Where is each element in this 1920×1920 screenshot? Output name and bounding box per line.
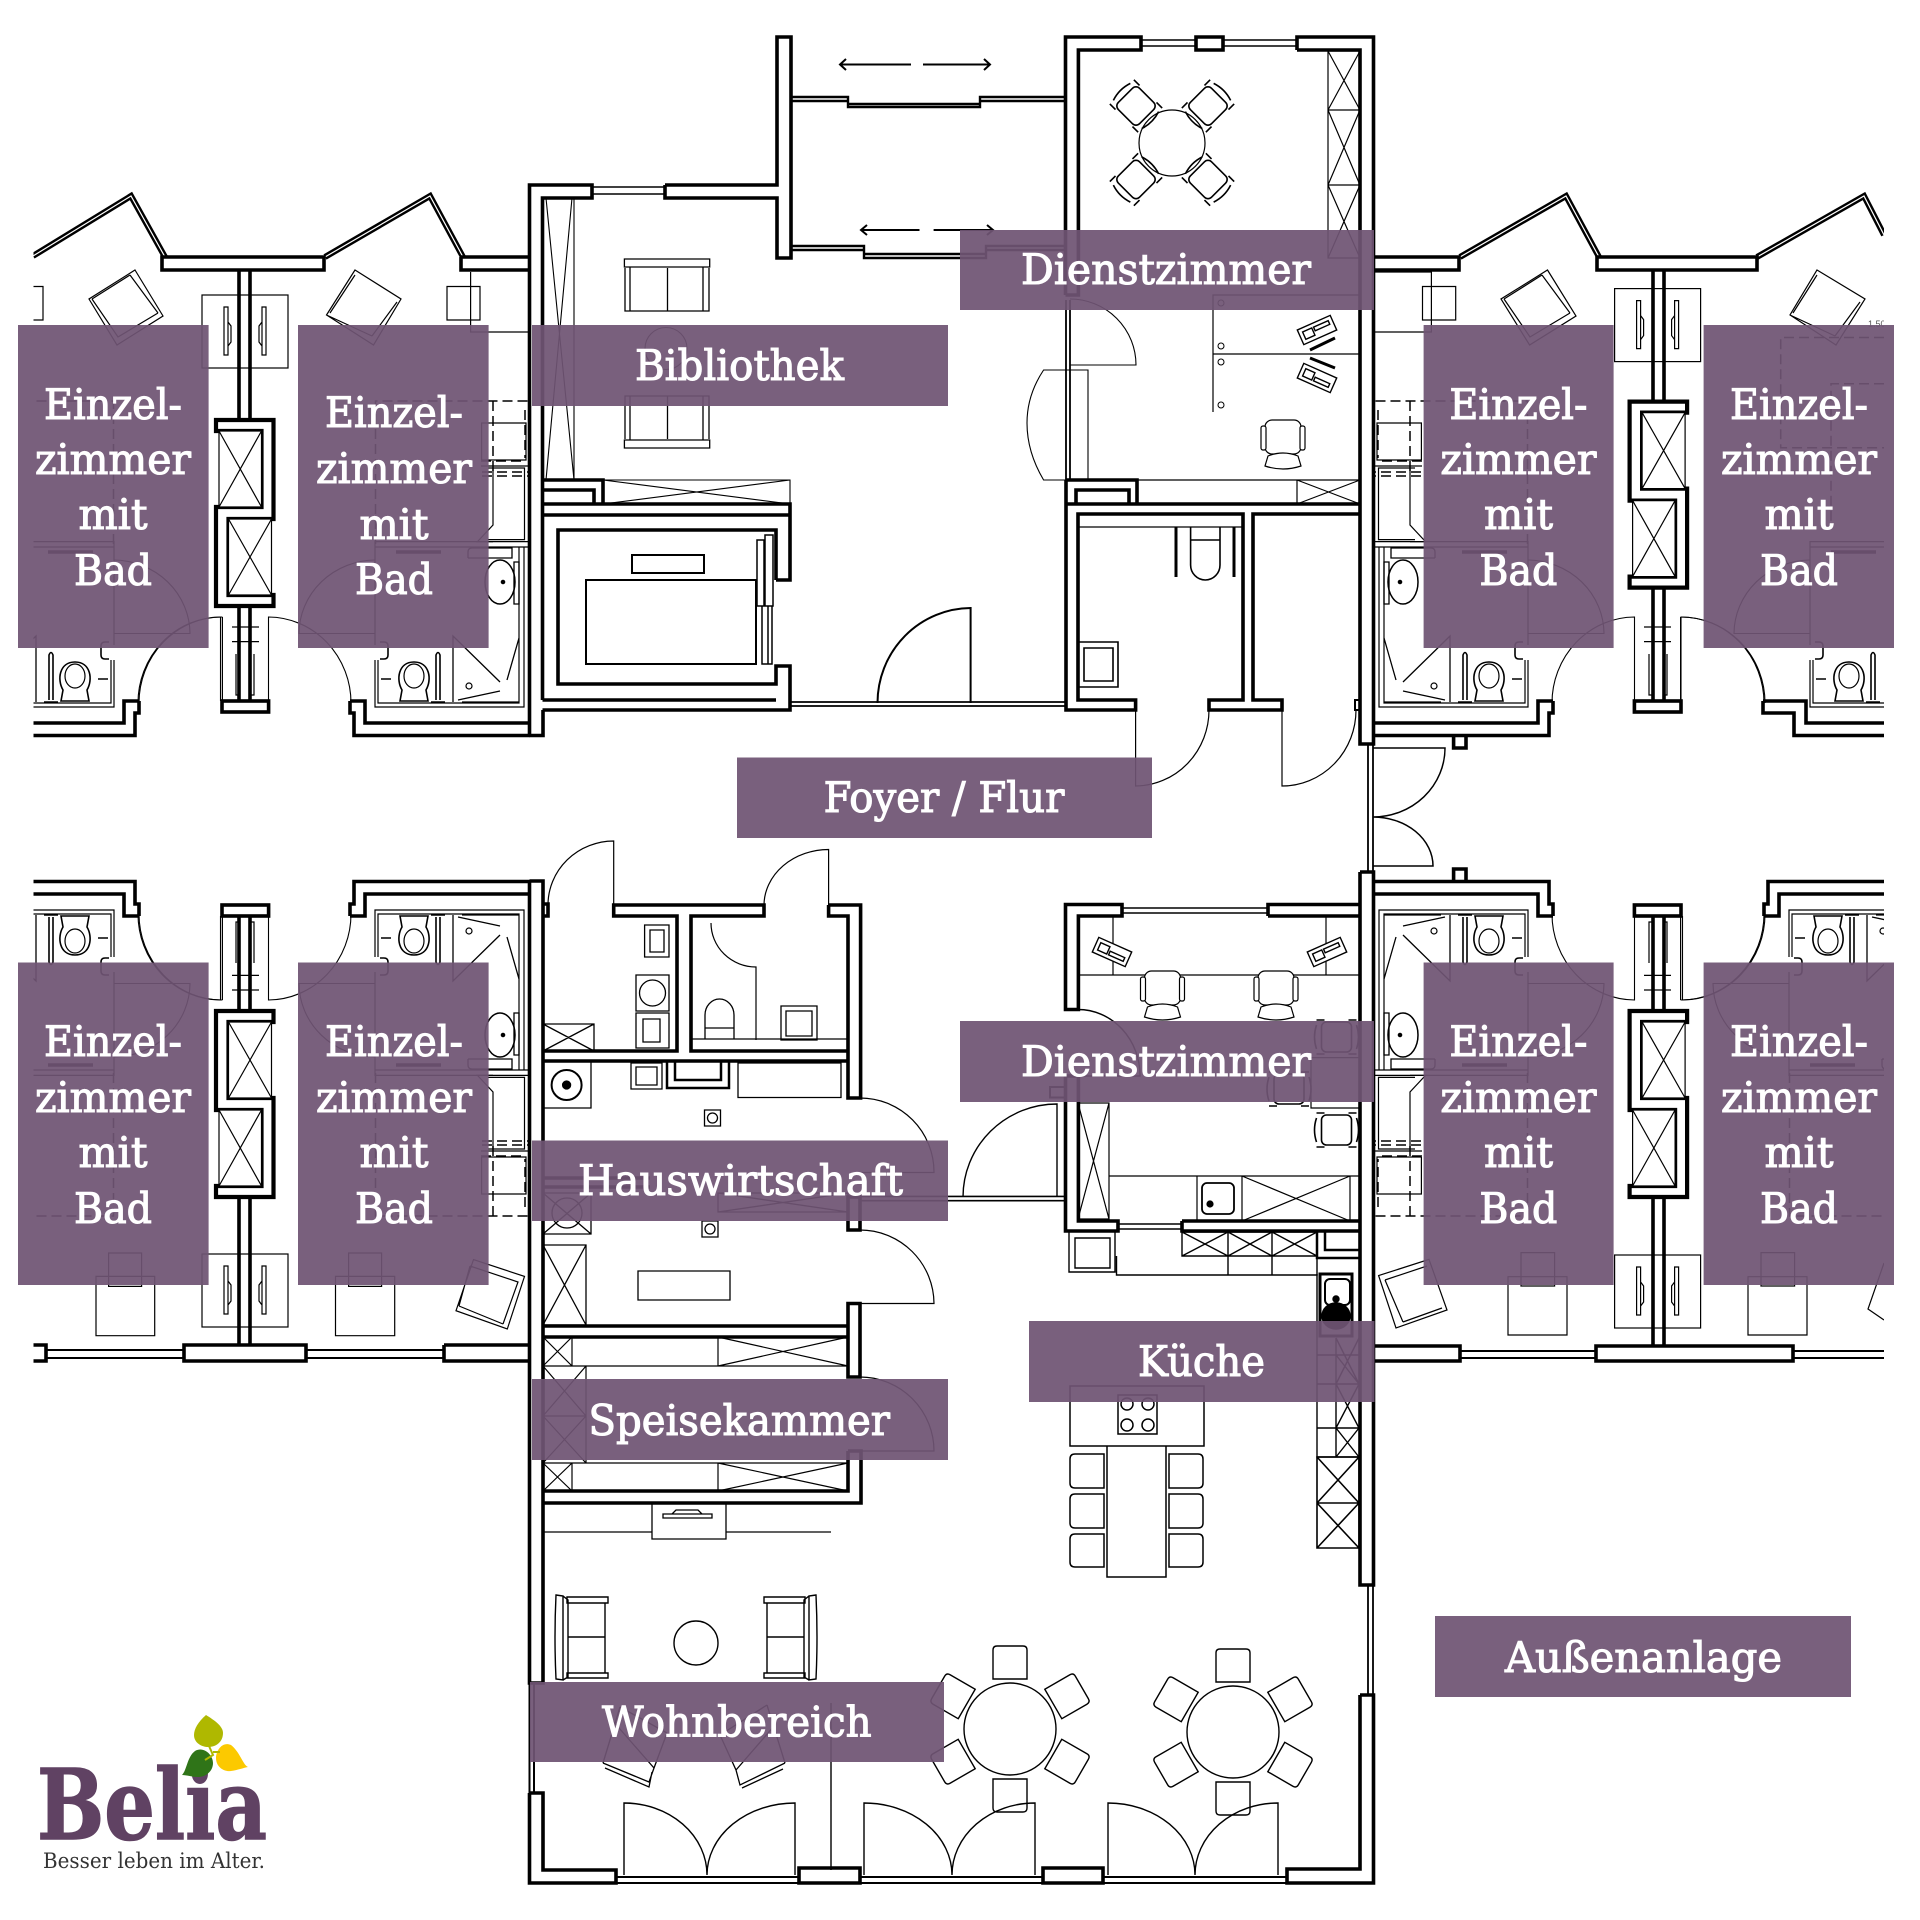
- panel: Einzelzimmer bottom left 2: Einzel-: [325, 1017, 463, 1066]
- panel: Einzelzimmer bottom left 1: zimmer: [35, 1073, 192, 1122]
- fixtures: Hauswirtschaft: [543, 925, 848, 1325]
- dining tables: Wohnbereich: [930, 1646, 1313, 1815]
- wing: bottom right rooms: [1373, 882, 1920, 1361]
- side table: Bibliothek: [645, 328, 687, 370]
- panel: Einzelzimmer top left 2: [298, 325, 489, 648]
- panel: Einzelzimmer top right 1: Bad: [1479, 546, 1557, 595]
- walls: Hauswirtschaft: [530, 881, 861, 1683]
- panel: Küche: [1029, 1321, 1374, 1402]
- panel: Einzelzimmer top right 2: zimmer: [1721, 435, 1878, 484]
- logo tagline: Besser leben im Alter.: [43, 1849, 265, 1873]
- panel: Einzelzimmer bottom right 1: [1424, 962, 1614, 1285]
- panel: Hauswirtschaft: Hauswirtschaft: [578, 1156, 903, 1205]
- panel: Einzelzimmer top left 2: zimmer: [316, 444, 473, 493]
- kitchen island and table: [1070, 1386, 1204, 1577]
- panel: Einzelzimmer top right 2: Einzel-: [1730, 380, 1868, 429]
- coffee table: Wohnbereich: [674, 1621, 718, 1665]
- panel: Einzelzimmer top left 1: zimmer: [35, 435, 192, 484]
- panel: Einzelzimmer bottom right 2: zimmer: [1721, 1073, 1878, 1122]
- panel: Einzelzimmer top left 1: mit: [78, 490, 148, 539]
- walls: Dienstzimmer lower: [860, 904, 1360, 1231]
- doors: Dienstzimmer lower: [963, 1010, 1140, 1197]
- panel: Einzelzimmer bottom right 2: Einzel-: [1730, 1017, 1868, 1066]
- panel: Einzelzimmer bottom right 1: zimmer: [1440, 1073, 1597, 1122]
- kitchen units: [1069, 1231, 1360, 1548]
- front glazing and main door: [790, 702, 1066, 706]
- panel: Einzelzimmer top right 1: [1424, 325, 1614, 648]
- sliding windows terrace: [791, 97, 1065, 258]
- armchairs: Wohnbereich: [603, 1705, 785, 1788]
- panel: Dienstzimmer top: Dienstzimmer: [1021, 245, 1312, 294]
- kitchenette: Dienstzimmer lower: [1078, 1020, 1360, 1221]
- panel: Einzelzimmer bottom right 2: Bad: [1760, 1184, 1838, 1233]
- desk: Dienstzimmer lower: [1078, 916, 1360, 1020]
- panel: Einzelzimmer bottom right 1: mit: [1484, 1128, 1553, 1177]
- panel: Dienstzimmer lower: [960, 1021, 1374, 1102]
- logo wordmark: Belia: [37, 1748, 267, 1862]
- arrow: sliding direction: [840, 59, 993, 235]
- WC fixtures: [1078, 527, 1220, 687]
- wing: bottom left rooms: [0, 882, 530, 1361]
- panel: Einzelzimmer bottom left 2: [298, 962, 489, 1285]
- panel: Speisekammer: Speisekammer: [588, 1396, 891, 1445]
- shelves: Speisekammer: [543, 1337, 848, 1491]
- shelf: Dienstzimmer: [1328, 51, 1360, 258]
- panel: Dienstzimmer top: [960, 230, 1374, 310]
- panel: Einzelzimmer bottom right 2: mit: [1764, 1128, 1834, 1177]
- panel: Einzelzimmer top left 1: [18, 325, 209, 648]
- panel: Foyer / Flur: [737, 758, 1152, 838]
- entrance doors and right wall: [1287, 736, 1466, 1883]
- panel: Einzelzimmer top left 2: Einzel-: [325, 388, 463, 437]
- panel: Einzelzimmer top left 1: Einzel-: [44, 380, 182, 429]
- logo: Belia: [37, 1715, 267, 1873]
- main building walls: [530, 37, 1466, 1883]
- panel: Einzelzimmer bottom left 1: mit: [78, 1128, 148, 1177]
- panel: Einzelzimmer top right 2: [1704, 325, 1894, 648]
- doors: Hauswirtschaft: [548, 841, 934, 1451]
- panel: Einzelzimmer bottom left 2: zimmer: [316, 1073, 473, 1122]
- desk: Dienstzimmer: [1213, 295, 1360, 469]
- panel: Einzelzimmer bottom right 1: Einzel-: [1449, 1017, 1587, 1066]
- table and chairs: Dienstzimmer meeting: [1108, 78, 1236, 207]
- panel: Einzelzimmer top left 1: Bad: [74, 546, 152, 595]
- panel: Einzelzimmer top right 1: mit: [1484, 490, 1553, 539]
- panel: Wohnbereich: [530, 1682, 944, 1762]
- panel: Foyer / Flur: Foyer / Flur: [824, 773, 1065, 822]
- panel: Bibliothek: Bibliothek: [635, 341, 845, 390]
- room wings: [0, 196, 1920, 1361]
- wing: top right rooms: [1373, 196, 1920, 736]
- panel: Einzelzimmer top right 2: mit: [1764, 490, 1834, 539]
- panel: Küche: Küche: [1138, 1337, 1265, 1386]
- panel: Einzelzimmer bottom left 2: Bad: [355, 1184, 433, 1233]
- panel: Außenanlage: Außenanlage: [1504, 1633, 1782, 1682]
- panel: Einzelzimmer top right 1: zimmer: [1440, 435, 1597, 484]
- icon: logo leaves: [182, 1715, 248, 1777]
- panel: Einzelzimmer bottom right 1: Bad: [1479, 1184, 1557, 1233]
- panel: Einzelzimmer bottom right 2: [1704, 962, 1894, 1285]
- panel: Einzelzimmer top left 2: Bad: [355, 555, 433, 604]
- sofas: Wohnbereich: [555, 1595, 817, 1680]
- panel: Außenanlage: [1435, 1616, 1851, 1697]
- panel: Einzelzimmer bottom left 1: [18, 962, 209, 1285]
- panel: Einzelzimmer bottom left 1: Bad: [74, 1184, 152, 1233]
- sofas: Bibliothek: [624, 259, 710, 448]
- panel: Dienstzimmer lower: Dienstzimmer: [1021, 1037, 1312, 1086]
- walls: Bibliothek and lift core: [530, 37, 791, 736]
- doors: Dienstzimmer: [1027, 299, 1136, 480]
- panel: Einzelzimmer top right 2: Bad: [1760, 546, 1838, 595]
- panel: Wohnbereich: Wohnbereich: [602, 1698, 872, 1747]
- terrace doors: Wohnbereich: [624, 1703, 1278, 1875]
- wing: top left rooms: [0, 196, 530, 736]
- panel: Hauswirtschaft: [532, 1140, 948, 1221]
- wing: top right rooms: 1.50: [1868, 319, 1886, 329]
- doors: WC block: [1136, 710, 1356, 786]
- panel: Einzelzimmer top left 2: mit: [360, 500, 429, 549]
- walls: Wohnbereich outer: [530, 1683, 1287, 1883]
- walls: Dienstzimmer top: [1066, 37, 1374, 744]
- panel: Einzelzimmer top right 1: Einzel-: [1449, 380, 1587, 429]
- panel: Speisekammer: [532, 1379, 948, 1460]
- panel: Einzelzimmer bottom left 1: Einzel-: [44, 1017, 182, 1066]
- panel: Einzelzimmer bottom left 2: mit: [360, 1128, 429, 1177]
- panel: Bibliothek: [532, 325, 948, 406]
- shelves: Bibliothek: [542, 198, 790, 504]
- walls: WC block: [1066, 480, 1360, 710]
- TV unit: Wohnbereich: [543, 1503, 831, 1539]
